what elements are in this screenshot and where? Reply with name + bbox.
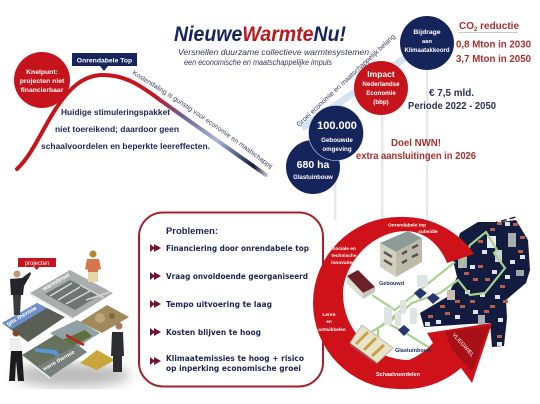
investment: Periode 2022 - 2050 <box>408 101 496 112</box>
goal: Doel NWN! <box>391 138 441 149</box>
layer: gas thermie: gas thermie <box>6 305 39 328</box>
callout: onrendabele top: Onrendabele Top <box>77 58 132 64</box>
house <box>347 270 375 299</box>
bullet: klimaatemissies: op inperking economische groei <box>166 364 301 373</box>
circle: impact: Impact <box>367 69 395 79</box>
ring labels: VLIEGWIEL <box>451 332 475 358</box>
ring labels: subsidie <box>418 229 438 235</box>
co2 reduction: 2 <box>474 27 478 33</box>
circle: impact <box>354 61 408 115</box>
circle: 100.000 <box>308 106 364 160</box>
circle: 100.000: omgeving <box>322 146 352 153</box>
circle: knelpunt: projecten niet <box>20 78 65 85</box>
person: woman <box>9 330 24 381</box>
callout: onrendabele top <box>72 53 137 71</box>
co2 reduction: 0,8 Mton in 2030 <box>456 40 531 50</box>
bullet: financiering: Financiering door onrendabele top <box>166 244 309 253</box>
ring labels: Onrendabele top <box>388 222 426 228</box>
circle: 680 ha: 680 ha <box>297 159 329 171</box>
layer: nature <box>80 305 129 333</box>
heading: problemen: Problemen: <box>166 226 218 237</box>
co2 reduction: 3,7 Mton in 2050 <box>456 54 531 65</box>
text block: stimuleringspakket: Huidige stimuleringspakket <box>61 107 170 117</box>
heat network pipes <box>366 232 505 352</box>
ring labels: Leren <box>322 312 336 318</box>
title: NieuweWarmteNu! <box>174 23 346 46</box>
co2 reduction: CO <box>459 21 474 32</box>
person: man <box>111 322 124 372</box>
greenhouse <box>350 325 393 365</box>
circle: knelpunt <box>14 52 70 108</box>
ring labels: Sociale en <box>332 246 356 252</box>
ring labels: innovaties <box>331 260 355 266</box>
vertical connector lines <box>334 70 428 230</box>
heat hubs <box>398 288 440 336</box>
investment <box>408 88 496 112</box>
text block: stimuleringspakket: niet toereikend; daardoor geen <box>55 124 179 134</box>
circle: impact: (bbp) <box>373 99 389 106</box>
circle: bijdrage: aan <box>422 39 432 45</box>
goal: extra aansluitingen in 2026 <box>356 151 476 162</box>
co2 reduction <box>456 21 531 65</box>
tanks <box>384 275 428 326</box>
circle: knelpunt: Knelpunt: <box>26 69 58 76</box>
subtitle: een economische en maatschappelijke impuls <box>184 58 332 67</box>
bullet: kosten: Kosten blijven te hoog <box>166 328 261 337</box>
circle: bijdrage: Klimaatakkoord <box>404 48 450 54</box>
circle: bijdrage: Bijdrage <box>413 29 441 36</box>
illustration: project layers <box>2 250 130 387</box>
goal <box>356 138 476 162</box>
ring arrow: vliegwiel <box>313 217 492 389</box>
person: presenter <box>10 270 31 315</box>
co2 reduction: reductie <box>477 21 519 32</box>
layer: city plan: warmtenet <box>41 273 71 293</box>
circle: 100.000: 100.000 <box>317 120 357 132</box>
map: netherlands <box>420 217 530 347</box>
panel: problemen <box>139 212 323 386</box>
layer: centre <box>50 320 100 350</box>
arrowhead shade <box>445 325 490 372</box>
bullet: klimaatemissies <box>150 354 304 373</box>
ring labels <box>318 222 475 378</box>
ring labels: Schaalvoordelen <box>376 372 421 378</box>
circle: impact: Nederlandse <box>362 81 400 88</box>
growth label: Groei economie en maatschappelijk belang <box>296 33 397 128</box>
label: glastuinbouw: Glastuinbouw <box>395 348 432 354</box>
label: gebouwd: Gebouwd <box>379 281 404 287</box>
layer: yellow <box>80 350 115 370</box>
curve label: kostendaling: Kostendaling is gunstig voor economie en maatschappij <box>132 70 273 170</box>
bullet: klimaatemissies: Klimaatemissies te hoog + risico <box>166 354 304 363</box>
text block: stimuleringspakket: schaalvoordelen en beperkte leereffecten. <box>41 141 210 151</box>
circle: 680 ha <box>286 140 340 194</box>
callout: projecten: projecten <box>25 261 49 267</box>
growth band <box>302 58 405 128</box>
subtitle: Versnellen duurzame collectieve warmtesystemen <box>178 48 370 57</box>
text block: stimuleringspakket <box>41 107 210 151</box>
bullet: tempo: Tempo uitvoering te laag <box>166 300 272 309</box>
circle: 100.000: Gebouwde <box>321 137 353 144</box>
circle: impact: Economie <box>366 90 396 97</box>
circle: knelpunt: financierbaar <box>21 87 64 94</box>
ring labels: en <box>326 320 332 325</box>
circle: bijdrage <box>400 16 454 70</box>
layer: warmte thermie: warm thermie <box>41 350 76 373</box>
ring labels: technische <box>331 253 357 259</box>
person: worker <box>85 250 101 282</box>
ring labels: ontwikkelen <box>318 327 346 333</box>
cost curve <box>17 75 266 175</box>
bullet: vraag: Vraag onvoldoende georganiseerd <box>166 272 308 281</box>
subtitle <box>178 48 370 67</box>
dune line <box>466 217 516 230</box>
map buildings <box>425 222 525 346</box>
building: gebouwd <box>380 231 422 277</box>
investment: € 7,5 mld. <box>429 88 474 99</box>
circle: 680 ha: Glastuinbouw <box>293 175 333 181</box>
